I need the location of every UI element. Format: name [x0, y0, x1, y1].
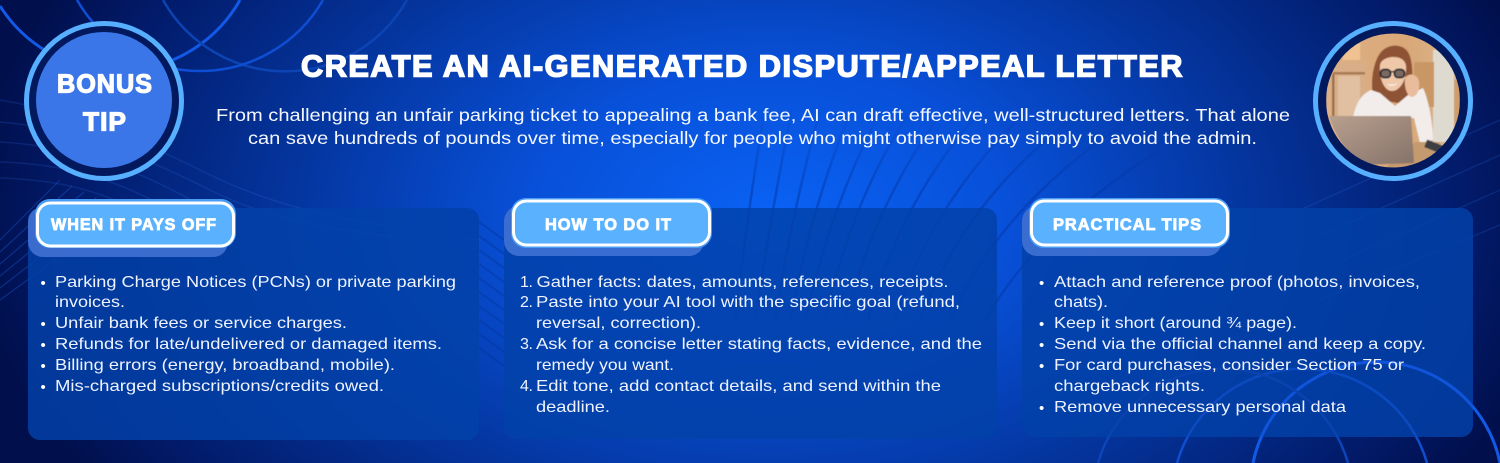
shirt	[1353, 88, 1433, 143]
list: how to do it: Ask for a concise letter stating facts, evidence, and the	[536, 336, 982, 353]
list: practical tips: Remove unnecessary personal data	[1054, 399, 1346, 416]
list: how to do it: 4.	[520, 378, 533, 395]
badge: bonus tip	[26, 24, 182, 178]
list: practical tips: •	[1039, 316, 1044, 333]
heading: how to do it	[504, 198, 712, 256]
list: when it pays off: Unfair bank fees or service charges.	[55, 315, 347, 332]
list: when it pays off: Billing errors (energy, broadband, mobile).	[55, 357, 395, 374]
heading: how to do it: HOW TO DO IT	[545, 215, 672, 234]
list: how to do it: Edit tone, add contact details, and send within the	[536, 378, 941, 395]
desk and phone	[1385, 142, 1440, 168]
list: when it pays off: •	[40, 316, 46, 333]
list: how to do it: 1.	[520, 274, 533, 291]
intro text: can save hundreds of pounds over time, especially for people who might otherwise pay simply to avoid the admin.	[248, 128, 1257, 148]
list: when it pays off	[40, 274, 456, 396]
laptop	[1329, 116, 1414, 165]
list: how to do it	[520, 274, 982, 416]
heading: practical tips	[1022, 198, 1230, 256]
badge: bonus tip: TIP	[83, 106, 127, 136]
list: how to do it: Gather facts: dates, amounts, references, receipts.	[536, 274, 948, 291]
list: practical tips: Attach and reference proof (photos, invoices,	[1054, 274, 1420, 291]
list: how to do it: reversal, correction).	[536, 315, 701, 332]
list: when it pays off: Parking Charge Notices (PCNs) or private parking	[55, 274, 456, 291]
list: when it pays off: •	[40, 275, 46, 292]
list: how to do it: Paste into your AI tool with the specific goal (refund,	[536, 294, 960, 311]
badge: bonus tip: BONUS	[57, 68, 153, 98]
list: practical tips: chargeback rights.	[1054, 378, 1205, 395]
list: practical tips: •	[1039, 358, 1044, 375]
heading: when it pays off: WHEN IT PAYS OFF	[51, 215, 217, 234]
list: when it pays off: •	[40, 337, 46, 354]
list: how to do it: 2.	[520, 294, 533, 311]
list: when it pays off: Mis-charged subscriptions/credits owed.	[55, 378, 384, 395]
hair	[1372, 46, 1413, 104]
intro text	[216, 105, 1290, 148]
list: how to do it: deadline.	[536, 399, 610, 416]
panel: how to do it	[504, 198, 997, 439]
list: practical tips: chats).	[1054, 294, 1108, 311]
intro text: From challenging an unfair parking ticket to appealing a bank fee, AI can draft effective, well-structured letters. That alone	[216, 105, 1290, 125]
list: when it pays off: •	[40, 358, 46, 375]
heading: when it pays off	[28, 199, 236, 257]
hand	[1405, 75, 1419, 97]
glasses	[1380, 70, 1390, 78]
list: practical tips: For card purchases, consider Section 75 or	[1054, 357, 1405, 374]
photo: woman at laptop	[1316, 24, 1470, 178]
list: practical tips: Keep it short (around ¾ page).	[1054, 315, 1297, 332]
heading: practical tips: PRACTICAL TIPS	[1053, 215, 1202, 234]
list: when it pays off: •	[40, 379, 46, 396]
wall and furniture	[1326, 33, 1460, 168]
list: practical tips: Send via the official channel and keep a copy.	[1054, 336, 1426, 353]
list: practical tips	[1039, 274, 1426, 417]
panel: when it pays off	[28, 199, 479, 440]
list: how to do it: 3.	[520, 336, 533, 353]
face	[1380, 57, 1406, 91]
title: CREATE AN AI-GENERATED DISPUTE/APPEAL LETTER	[301, 48, 1184, 84]
list: practical tips: •	[1039, 275, 1044, 292]
list: when it pays off: invoices.	[55, 294, 125, 311]
list: practical tips: •	[1039, 337, 1044, 354]
list: when it pays off: Refunds for late/undelivered or damaged items.	[55, 336, 442, 353]
panel: practical tips	[1022, 198, 1500, 463]
list: how to do it: remedy you want.	[536, 357, 674, 374]
list: practical tips: •	[1039, 400, 1044, 417]
